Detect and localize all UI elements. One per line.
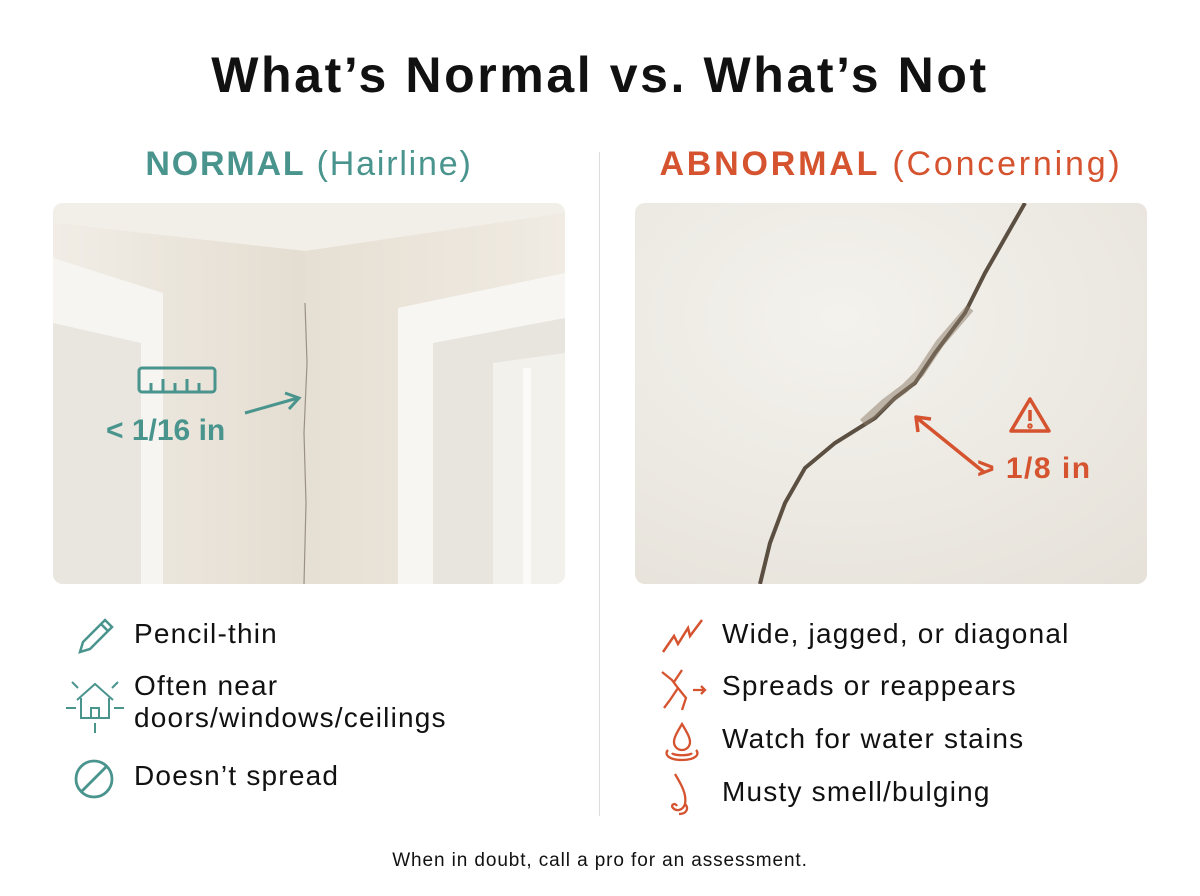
icon: zigzag — [662, 619, 703, 653]
divider — [599, 152, 600, 816]
photo: normal hairline crack — [53, 203, 565, 584]
heading: normal: NORMAL (Hairline) — [145, 145, 473, 183]
heading: abnormal: ABNORMAL (Concerning) — [659, 145, 1123, 183]
icon: water drop — [665, 722, 699, 762]
title: What’s Normal vs. What’s Not — [211, 47, 989, 103]
text: water stains: Watch for water stains — [722, 723, 1024, 754]
icon: no sign — [74, 760, 114, 798]
list: abnormal traits — [661, 618, 1070, 816]
text: spreads: Spreads or reappears — [722, 670, 1017, 701]
icon: pencil — [78, 618, 114, 654]
text: musty smell: Musty smell/bulging — [722, 776, 991, 807]
door frame — [53, 258, 163, 584]
icon: house — [66, 681, 124, 733]
text: often near: doors/windows/ceilings — [134, 702, 447, 733]
photo: normal hairline crack: < 1/16 in — [106, 414, 225, 447]
text: doesn't spread: Doesn’t spread — [134, 760, 339, 791]
icon: spreading crack — [661, 669, 706, 710]
text: often near — [134, 670, 447, 733]
footer note: When in doubt, call a pro for an assessment. — [392, 850, 808, 871]
text: often near: Often near — [134, 670, 278, 701]
list: normal traits — [66, 618, 447, 798]
text: pencil-thin: Pencil-thin — [134, 618, 278, 649]
photo: abnormal wide crack: > 1/8 in — [977, 452, 1092, 485]
text: wide jagged: Wide, jagged, or diagonal — [722, 618, 1070, 649]
photo: abnormal wide crack — [635, 203, 1147, 584]
icon: nose — [670, 773, 688, 816]
window frame — [398, 273, 565, 584]
